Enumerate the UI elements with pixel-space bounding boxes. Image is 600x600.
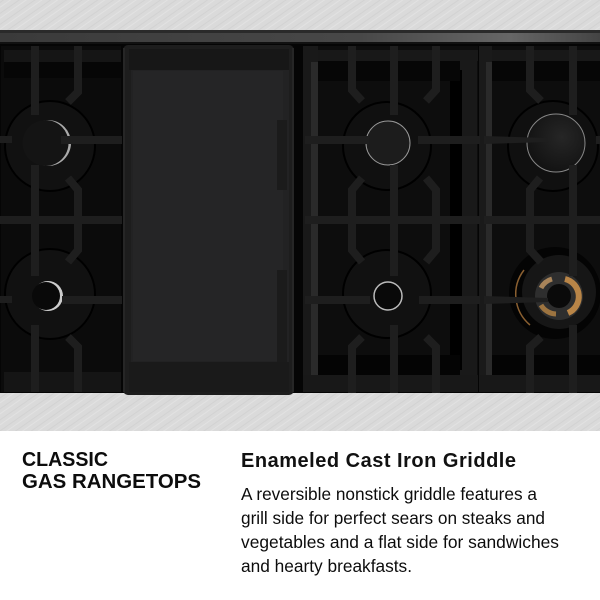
panel: right burner tray <box>479 46 600 392</box>
panel: stainless counter top <box>0 0 600 30</box>
panel: rangetop rear trim <box>0 30 600 44</box>
text block: feature description <box>241 484 559 576</box>
panel: left burner tray <box>1 46 121 392</box>
panel: stainless counter bottom <box>0 392 600 431</box>
panel: griddle <box>123 45 294 395</box>
burner: top right large <box>508 101 598 191</box>
heading: product line <box>22 449 201 493</box>
heading: product line: GAS RANGETOPS <box>22 471 201 493</box>
burner: bottom right open with brass ring <box>509 247 600 339</box>
burner: top left <box>5 101 95 191</box>
text block: feature description: and hearty breakfasts. <box>241 556 412 576</box>
burner: bottom middle <box>343 250 431 338</box>
grate: horizontal bars <box>0 136 600 304</box>
grate: vertical tines <box>35 46 573 393</box>
heading: feature title: Enameled Cast Iron Griddle <box>241 450 516 472</box>
text block: feature description: vegetables and a flat side for sandwiches <box>241 532 559 552</box>
text block: feature description: grill side for perfect sears on steaks and <box>241 508 545 528</box>
panel: black cooktop base <box>0 44 600 393</box>
heading: product line: CLASSIC <box>22 449 108 471</box>
panel: middle burner tray <box>303 46 478 392</box>
burner: top middle <box>343 102 431 190</box>
text block: feature description: A reversible nonstick griddle features a <box>241 484 537 504</box>
burner: bottom left <box>5 249 95 339</box>
